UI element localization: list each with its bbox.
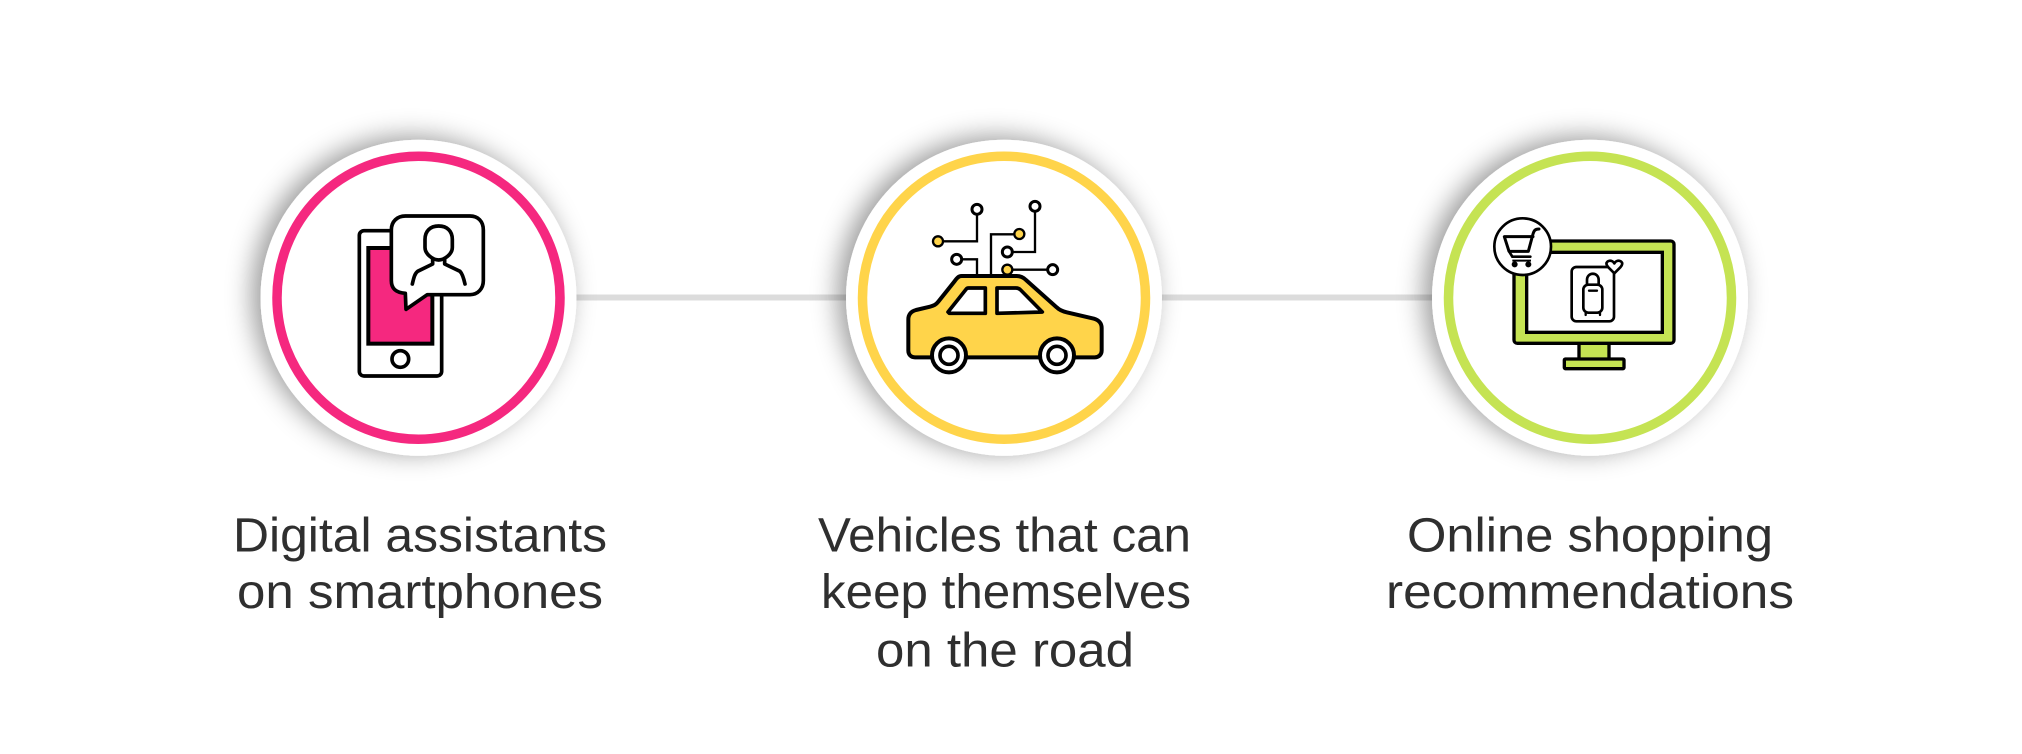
panel: online shopping (1386, 140, 1794, 619)
panel: self-driving vehicles (818, 140, 1191, 678)
label: online shopping (1386, 510, 1794, 619)
circle badge: green ring (1432, 140, 1748, 456)
connector line between circles (570, 294, 1450, 300)
label: self-driving vehicles (818, 510, 1191, 678)
panel: digital assistants (233, 140, 607, 619)
circle badge: yellow ring (846, 140, 1162, 456)
label: self-driving vehicles: keep themselves (821, 566, 1191, 619)
label: online shopping: recommendations (1386, 566, 1794, 619)
label: self-driving vehicles: on the road (876, 625, 1134, 678)
icon: monitor with shopping cart (1494, 218, 1674, 369)
icon: smartphone with chat bubble (359, 216, 483, 376)
label: online shopping: Online shopping (1407, 510, 1773, 563)
icon: connected car (908, 201, 1102, 372)
label: digital assistants: Digital assistants (233, 510, 607, 563)
circle badge: pink ring (260, 140, 576, 456)
label: digital assistants (233, 510, 607, 619)
label: digital assistants: on smartphones (237, 566, 603, 619)
label: self-driving vehicles: Vehicles that can (818, 510, 1191, 563)
